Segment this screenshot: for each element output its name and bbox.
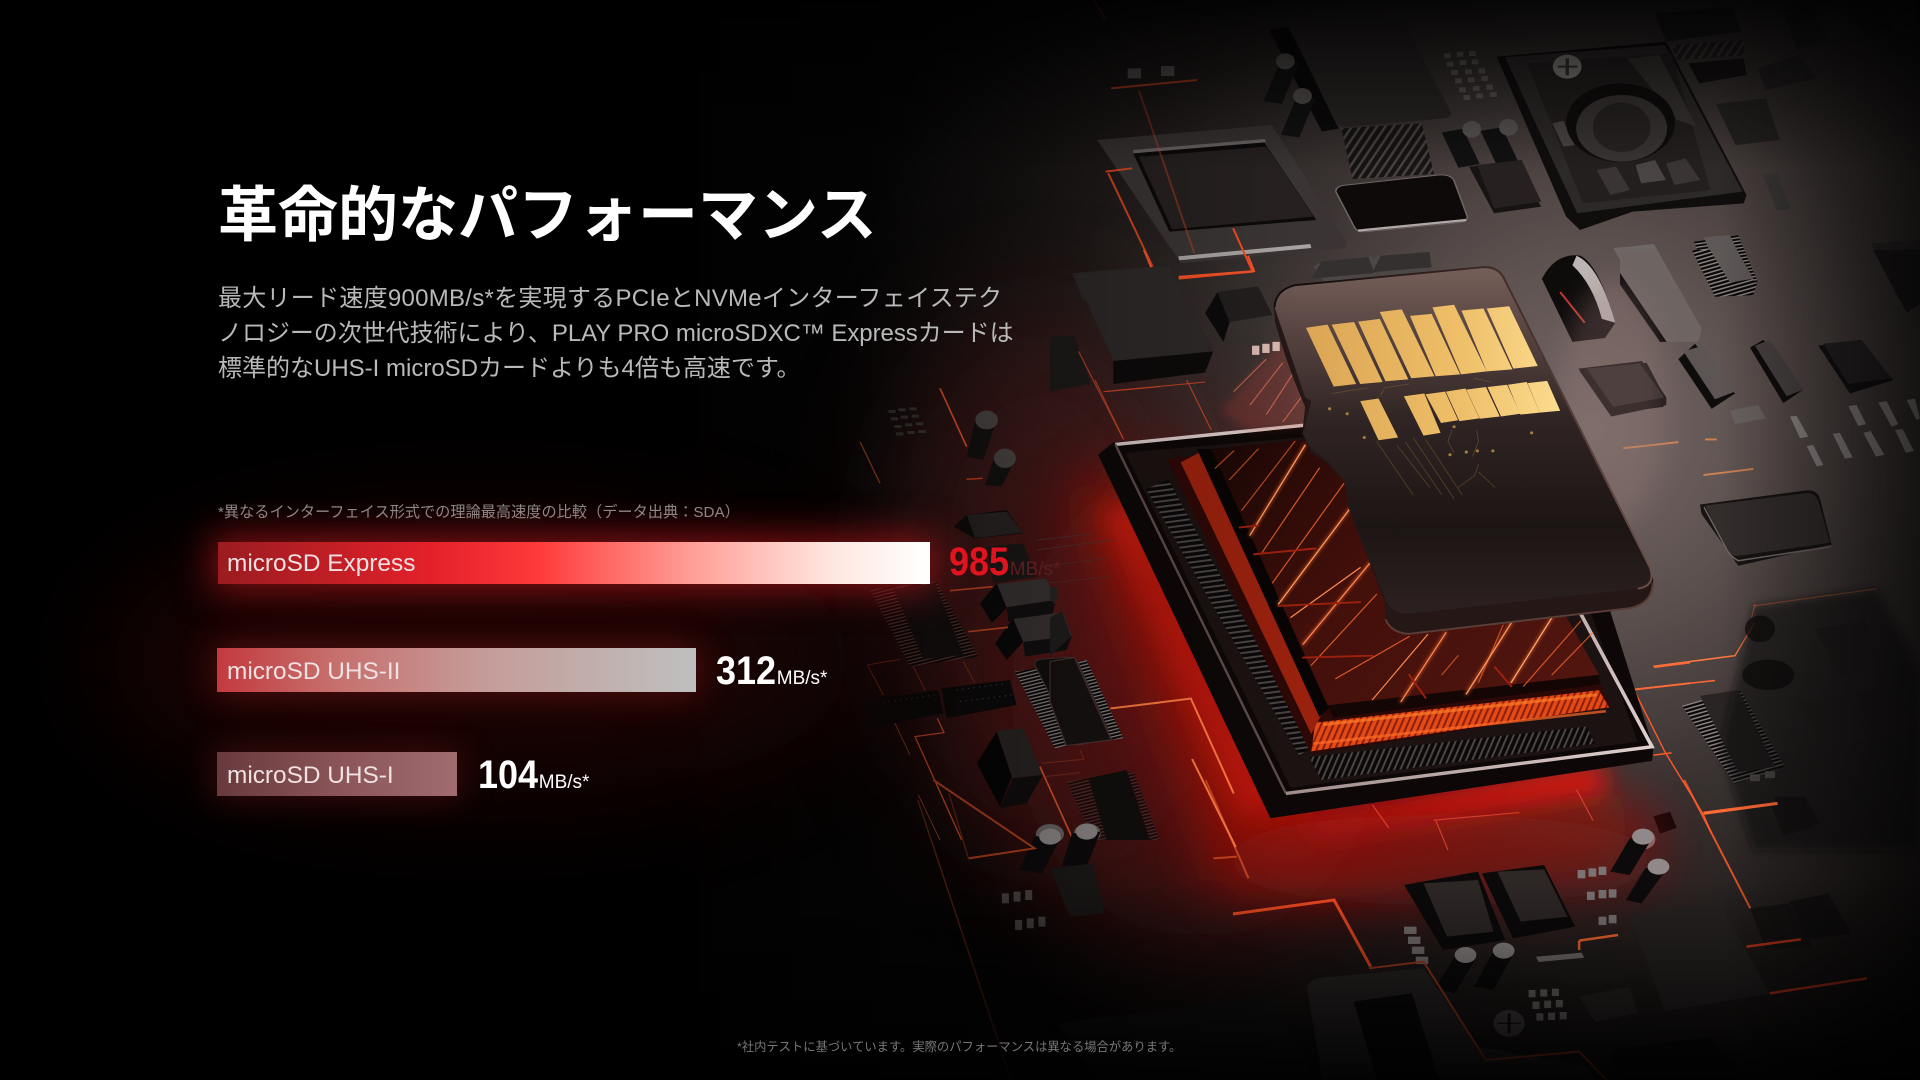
description text: 標準的なUHS-I microSDカードよりも4倍も高速です。 — [218, 355, 800, 382]
value: 312 MB/s: MB/s* — [777, 668, 827, 689]
bar: microSD UHS-I: microSD UHS-I — [227, 762, 394, 789]
caps bottom — [1036, 823, 1101, 844]
dark bars and pads — [1620, 250, 1920, 424]
bottom components — [918, 780, 1867, 1080]
pad grid left — [888, 407, 926, 435]
large flat chip — [1700, 490, 1832, 566]
twin chips — [1404, 865, 1575, 950]
footnote: *社内テストに基づいています。実際のパフォーマンスは異なる場合があります。 — [737, 1040, 1181, 1054]
value: 985 MB/s — [949, 540, 1060, 584]
bar: microSD UHS-II: microSD UHS-II — [227, 658, 400, 685]
gold circuit traces — [1332, 378, 1495, 499]
speaker housing — [1497, 42, 1747, 230]
light rays above chip — [1221, 342, 1311, 430]
bar: microSD UHS-I — [217, 752, 457, 796]
socket bottom — [1307, 968, 1595, 1080]
description text: 最大リード速度900MB/s*を実現するPCIeとNVMeインターフェイステク — [218, 285, 1002, 312]
pinned chip left — [870, 582, 978, 667]
left pinned strip low — [1067, 770, 1160, 840]
traces left — [860, 380, 1160, 840]
white pads — [1790, 398, 1920, 466]
silver chip — [1620, 250, 1702, 342]
flat IC beside housing — [1469, 160, 1541, 213]
capacitors left — [967, 411, 1016, 487]
orange light streaks — [1215, 441, 1593, 702]
block lower left — [977, 728, 1043, 808]
capacitors bottom — [1019, 824, 1669, 993]
value: 104 MB/s — [478, 753, 590, 797]
chrome capsule — [1542, 255, 1615, 342]
top right components — [1072, 0, 1920, 300]
pinned chip middle — [1015, 657, 1123, 748]
right traces — [1079, 250, 1690, 850]
black blocks bottom — [1050, 797, 1851, 1080]
bar: microSD Express — [218, 542, 930, 584]
chip pins — [1146, 480, 1595, 780]
small blocks — [953, 510, 1072, 660]
microSD card — [1274, 267, 1653, 635]
description text — [218, 285, 1014, 382]
blocks above card — [1072, 253, 1433, 300]
pad grid — [1128, 51, 1497, 100]
value: 312 MB/s — [716, 649, 828, 693]
value: 985 MB/s: 985 — [949, 540, 1009, 584]
upper gold contacts — [1306, 305, 1538, 387]
top right chips on lit floor — [1613, 235, 1920, 300]
small rounded chip — [1336, 175, 1467, 232]
bar chart: read speeds — [188, 510, 960, 814]
pinned chip — [1692, 250, 1757, 297]
bar: microSD UHS-II — [217, 648, 696, 692]
value: 104 MB/s: 104 — [478, 753, 538, 797]
title: 革命的なパフォーマンス — [218, 182, 877, 249]
card face — [1274, 267, 1652, 614]
pink light on board right of card — [1560, 281, 1666, 526]
chip frame — [1098, 401, 1653, 818]
dark blocks lower right — [1633, 589, 1920, 850]
pads bottom — [1404, 867, 1616, 1021]
value: 104 MB/s: MB/s* — [539, 772, 589, 793]
description text: ノロジーの次世代技術により、PLAY PRO microSDXC™ Expressカードは — [218, 320, 1014, 347]
pinned IC lower right — [1682, 690, 1785, 784]
upper left block — [1050, 252, 1666, 746]
small parts upper right — [1655, 0, 1920, 210]
traces bottom — [918, 780, 1867, 1080]
socket with square chip — [1097, 125, 1347, 263]
capacitors — [1264, 53, 1519, 168]
faint etched tracks — [1037, 534, 1113, 583]
chart note: *異なるインターフェイス形式での理論最高速度の比較（データ出典：SDA） — [218, 504, 740, 521]
red glow on board — [1010, 460, 1670, 940]
value: 312 MB/s: 312 — [716, 649, 776, 693]
right side board details — [1620, 250, 1920, 850]
left board details — [860, 380, 1160, 844]
red ambient glow behind bars — [100, 520, 860, 800]
lower gold contacts — [1360, 381, 1560, 440]
value: 985 MB/s: MB/s* — [1010, 559, 1060, 580]
warm tint on board left of chip — [890, 320, 1190, 840]
large block — [1269, 18, 1451, 132]
red traces top — [1094, 0, 1253, 279]
bar: microSD Express: microSD Express — [227, 550, 415, 577]
orange traces — [1623, 439, 1877, 834]
chip package with streaks — [1166, 424, 1611, 754]
heat fins — [1341, 123, 1434, 179]
microSD on chip: centre composition — [1050, 250, 1690, 850]
lit board surface — [700, 0, 1920, 1080]
connectors — [865, 680, 1017, 728]
card side — [1274, 307, 1653, 635]
